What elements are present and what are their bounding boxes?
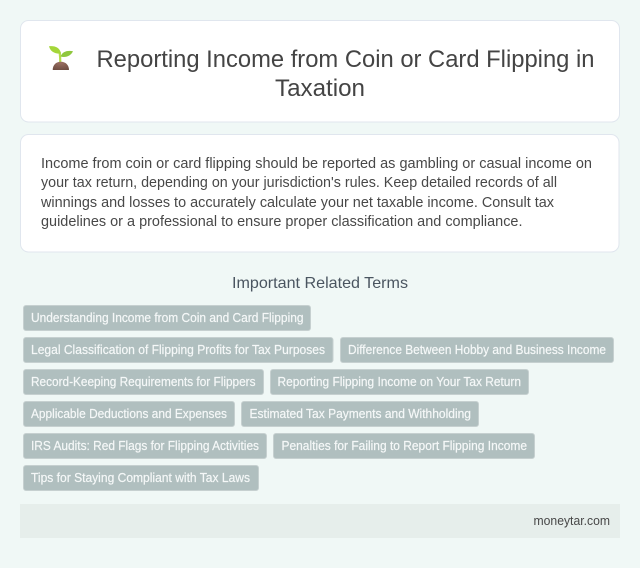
- tag: legal classification: [24, 338, 333, 362]
- tag: estimated tax: [242, 402, 478, 426]
- panel: related term tags: [24, 306, 614, 490]
- tag: hobby vs business: [340, 338, 614, 362]
- panel: summary card: [20, 134, 619, 252]
- heading: important related terms: Important Related Terms: [232, 275, 408, 292]
- summary text: your tax return, depending on your jurisdiction's rules. Keep detailed records of all: [41, 175, 557, 191]
- summary text: winnings and losses to accurately calculate your net taxable income. Consult tax: [40, 195, 555, 211]
- tag: understanding income: [24, 306, 310, 330]
- summary text: [40, 156, 592, 230]
- title: Reporting Income from Coin or Card Flipping in: [96, 46, 594, 73]
- footer source text: moneytar.com: [534, 514, 610, 528]
- tag: estimated tax: Estimated Tax Payments and Withholding: [250, 407, 471, 421]
- footer: [20, 504, 620, 538]
- tag: penalties: [274, 434, 534, 458]
- tag: hobby vs business: Difference Between Hobby and Business Income: [348, 343, 606, 357]
- summary text: guidelines or a professional to ensure proper classification and compliance.: [41, 214, 522, 230]
- tag: compliance tips: Tips for Staying Compliant with Tax Laws: [31, 471, 250, 485]
- tag: record-keeping: Record-Keeping Requirements for Flippers: [31, 375, 256, 389]
- panel: title card: [20, 20, 620, 122]
- title: Taxation: [275, 75, 365, 102]
- tag: reporting flipping income: Reporting Flipping Income on Your Tax Return: [278, 375, 521, 389]
- tag: reporting flipping income: [270, 370, 528, 394]
- tag: penalties: Penalties for Failing to Report Flipping Income: [282, 439, 527, 453]
- tag: record-keeping: [24, 370, 264, 394]
- tag: understanding income: Understanding Income from Coin and Card Flipping: [31, 311, 304, 325]
- tag: deductions: Applicable Deductions and Expenses: [31, 407, 227, 421]
- tag: irs audits: [24, 434, 266, 458]
- tag: irs audits: IRS Audits: Red Flags for Flipping Activities: [31, 439, 259, 453]
- tag: deductions: [24, 402, 234, 426]
- summary text: Income from coin or card flipping should be reported as gambling or casual income on: [41, 156, 592, 172]
- icon: sprout: [49, 46, 73, 70]
- tag: legal classification: Legal Classification of Flipping Profits for Tax Purposes: [31, 343, 325, 357]
- title: [96, 46, 594, 102]
- tag: compliance tips: [24, 466, 258, 490]
